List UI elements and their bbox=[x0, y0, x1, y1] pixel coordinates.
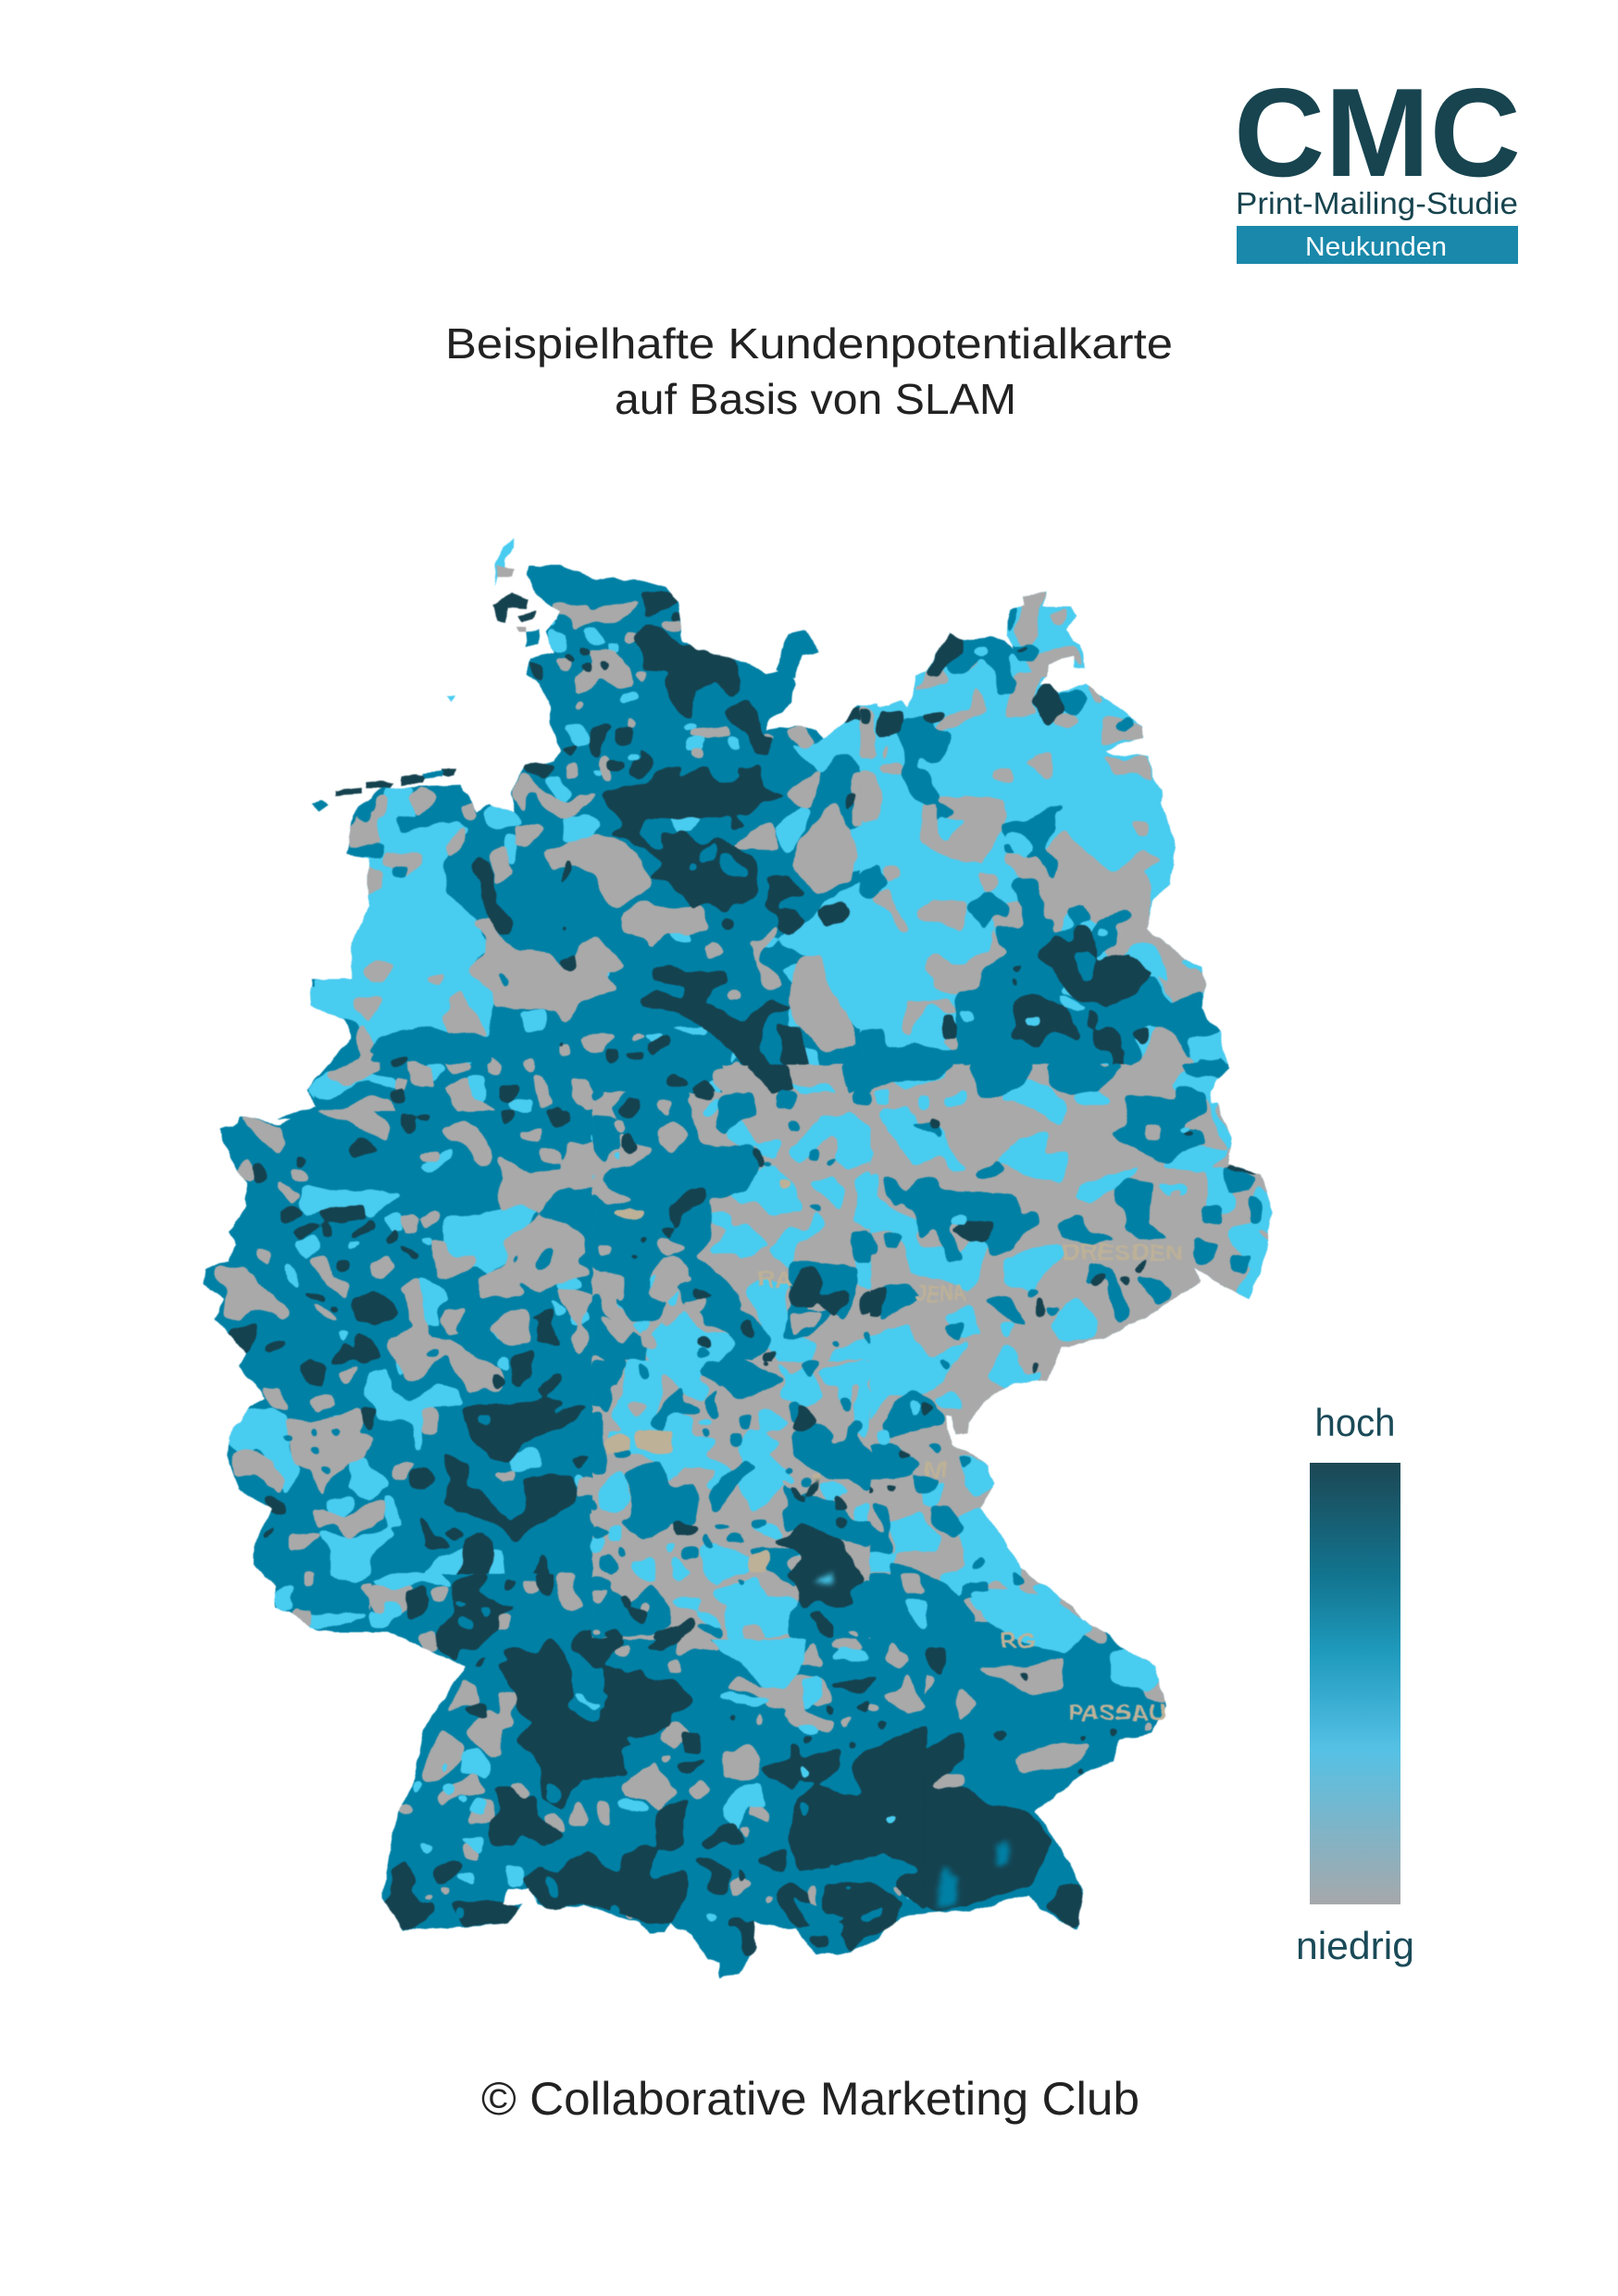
legend label low: niedrig bbox=[1296, 1924, 1414, 1967]
detail: north-east sector bbox=[859, 591, 1228, 1067]
north-east: grey class bbox=[861, 593, 1206, 1111]
detail: central sector, upper bbox=[592, 1092, 870, 1370]
north-west: dark class bbox=[391, 593, 870, 1129]
north-west: teal patches over grey bbox=[346, 794, 509, 1062]
west-central: dark class bbox=[227, 1111, 696, 1666]
detail: southern sector bbox=[370, 1574, 926, 2006]
north-west: light blue class bbox=[315, 609, 870, 1124]
ghosted city labels: JENA bbox=[916, 1281, 966, 1306]
central upper: teal class bbox=[592, 1092, 870, 1370]
logo band bbox=[1237, 226, 1518, 264]
north-east: dark class bbox=[861, 634, 1152, 1072]
east-central: light blue class bbox=[722, 1068, 1278, 1620]
north-west: grey class bbox=[315, 603, 870, 1129]
south: light blue class bbox=[370, 1574, 926, 1923]
detail: north-west sector bbox=[315, 593, 870, 1129]
east-central: teal class bbox=[722, 1065, 1261, 1620]
ghosted city labels: PASSAU bbox=[1067, 1701, 1166, 1726]
logo wordmark CMC: CMC bbox=[1234, 62, 1521, 203]
legend gradient bar bbox=[1310, 1463, 1400, 1904]
legend: colour scale bbox=[1296, 1401, 1414, 1967]
detail: central sector, lower bbox=[592, 1361, 870, 1639]
legend label high: hoch bbox=[1314, 1401, 1396, 1444]
title bbox=[445, 319, 1173, 423]
detail: west-central sector bbox=[204, 1111, 759, 1666]
west-central: cut-outs inside dark bbox=[473, 1416, 526, 1518]
east-central: small accents bbox=[768, 1125, 1193, 1561]
central lower: teal class bbox=[592, 1361, 870, 1639]
logo band label: Neukunden bbox=[1305, 232, 1447, 262]
overview layer: light blue class bbox=[308, 888, 368, 1099]
east-south sector: light patches bbox=[971, 1590, 1163, 1691]
central lower: light blue class bbox=[592, 1361, 870, 1639]
detail: east-central sector bbox=[722, 1065, 1278, 1620]
east-central: dark class bbox=[740, 1065, 1259, 1620]
central upper: dark class and label patches bbox=[614, 1092, 870, 1367]
south: teal and light specks inside dark bbox=[452, 1602, 898, 1941]
ghosted city labels: M bbox=[924, 1457, 948, 1482]
central lower: grey patches bbox=[592, 1386, 865, 1639]
ghosted city labels bbox=[757, 1241, 1184, 1726]
central lower: dark class and label patches bbox=[604, 1361, 865, 1639]
overview layer: grey class bbox=[924, 1622, 1166, 1791]
ghosted city labels: RG bbox=[1002, 1628, 1035, 1653]
central upper: light blue class bbox=[592, 1097, 870, 1370]
south: grey class bbox=[370, 1574, 926, 1919]
north-east: teal and light accents bbox=[937, 646, 1221, 1066]
logo subtitle: Print-Mailing-Studie bbox=[1236, 186, 1518, 220]
map: customer potential of Germany bbox=[202, 538, 1274, 1979]
west-central: light blue class bbox=[225, 1129, 646, 1628]
logo: CMC Print-Mailing-Studie Neukunden bbox=[1234, 62, 1521, 264]
ghosted city labels: DRESDEN bbox=[1062, 1241, 1184, 1266]
west-central: grey class bbox=[216, 1111, 636, 1650]
base class: high potential (teal) bbox=[203, 564, 1273, 1979]
title: Beispielhafte Kundenpotentialkarte bbox=[445, 319, 1173, 368]
footer copyright: © Collaborative Marketing Club bbox=[481, 2073, 1139, 2125]
south: dark class bbox=[384, 1574, 926, 1956]
west-central: teal patches over grey bbox=[281, 1249, 554, 1611]
north-east: teal class bbox=[861, 607, 1228, 1111]
ghosted city labels: RA bbox=[757, 1267, 792, 1292]
overview layer: dark class bbox=[924, 1646, 1118, 1928]
central upper: grey patches bbox=[592, 1102, 824, 1370]
title: auf Basis von SLAM bbox=[615, 375, 1016, 423]
north-west: teal specks inside the dark class bbox=[641, 829, 747, 877]
islands outside the mainland bbox=[310, 537, 819, 812]
